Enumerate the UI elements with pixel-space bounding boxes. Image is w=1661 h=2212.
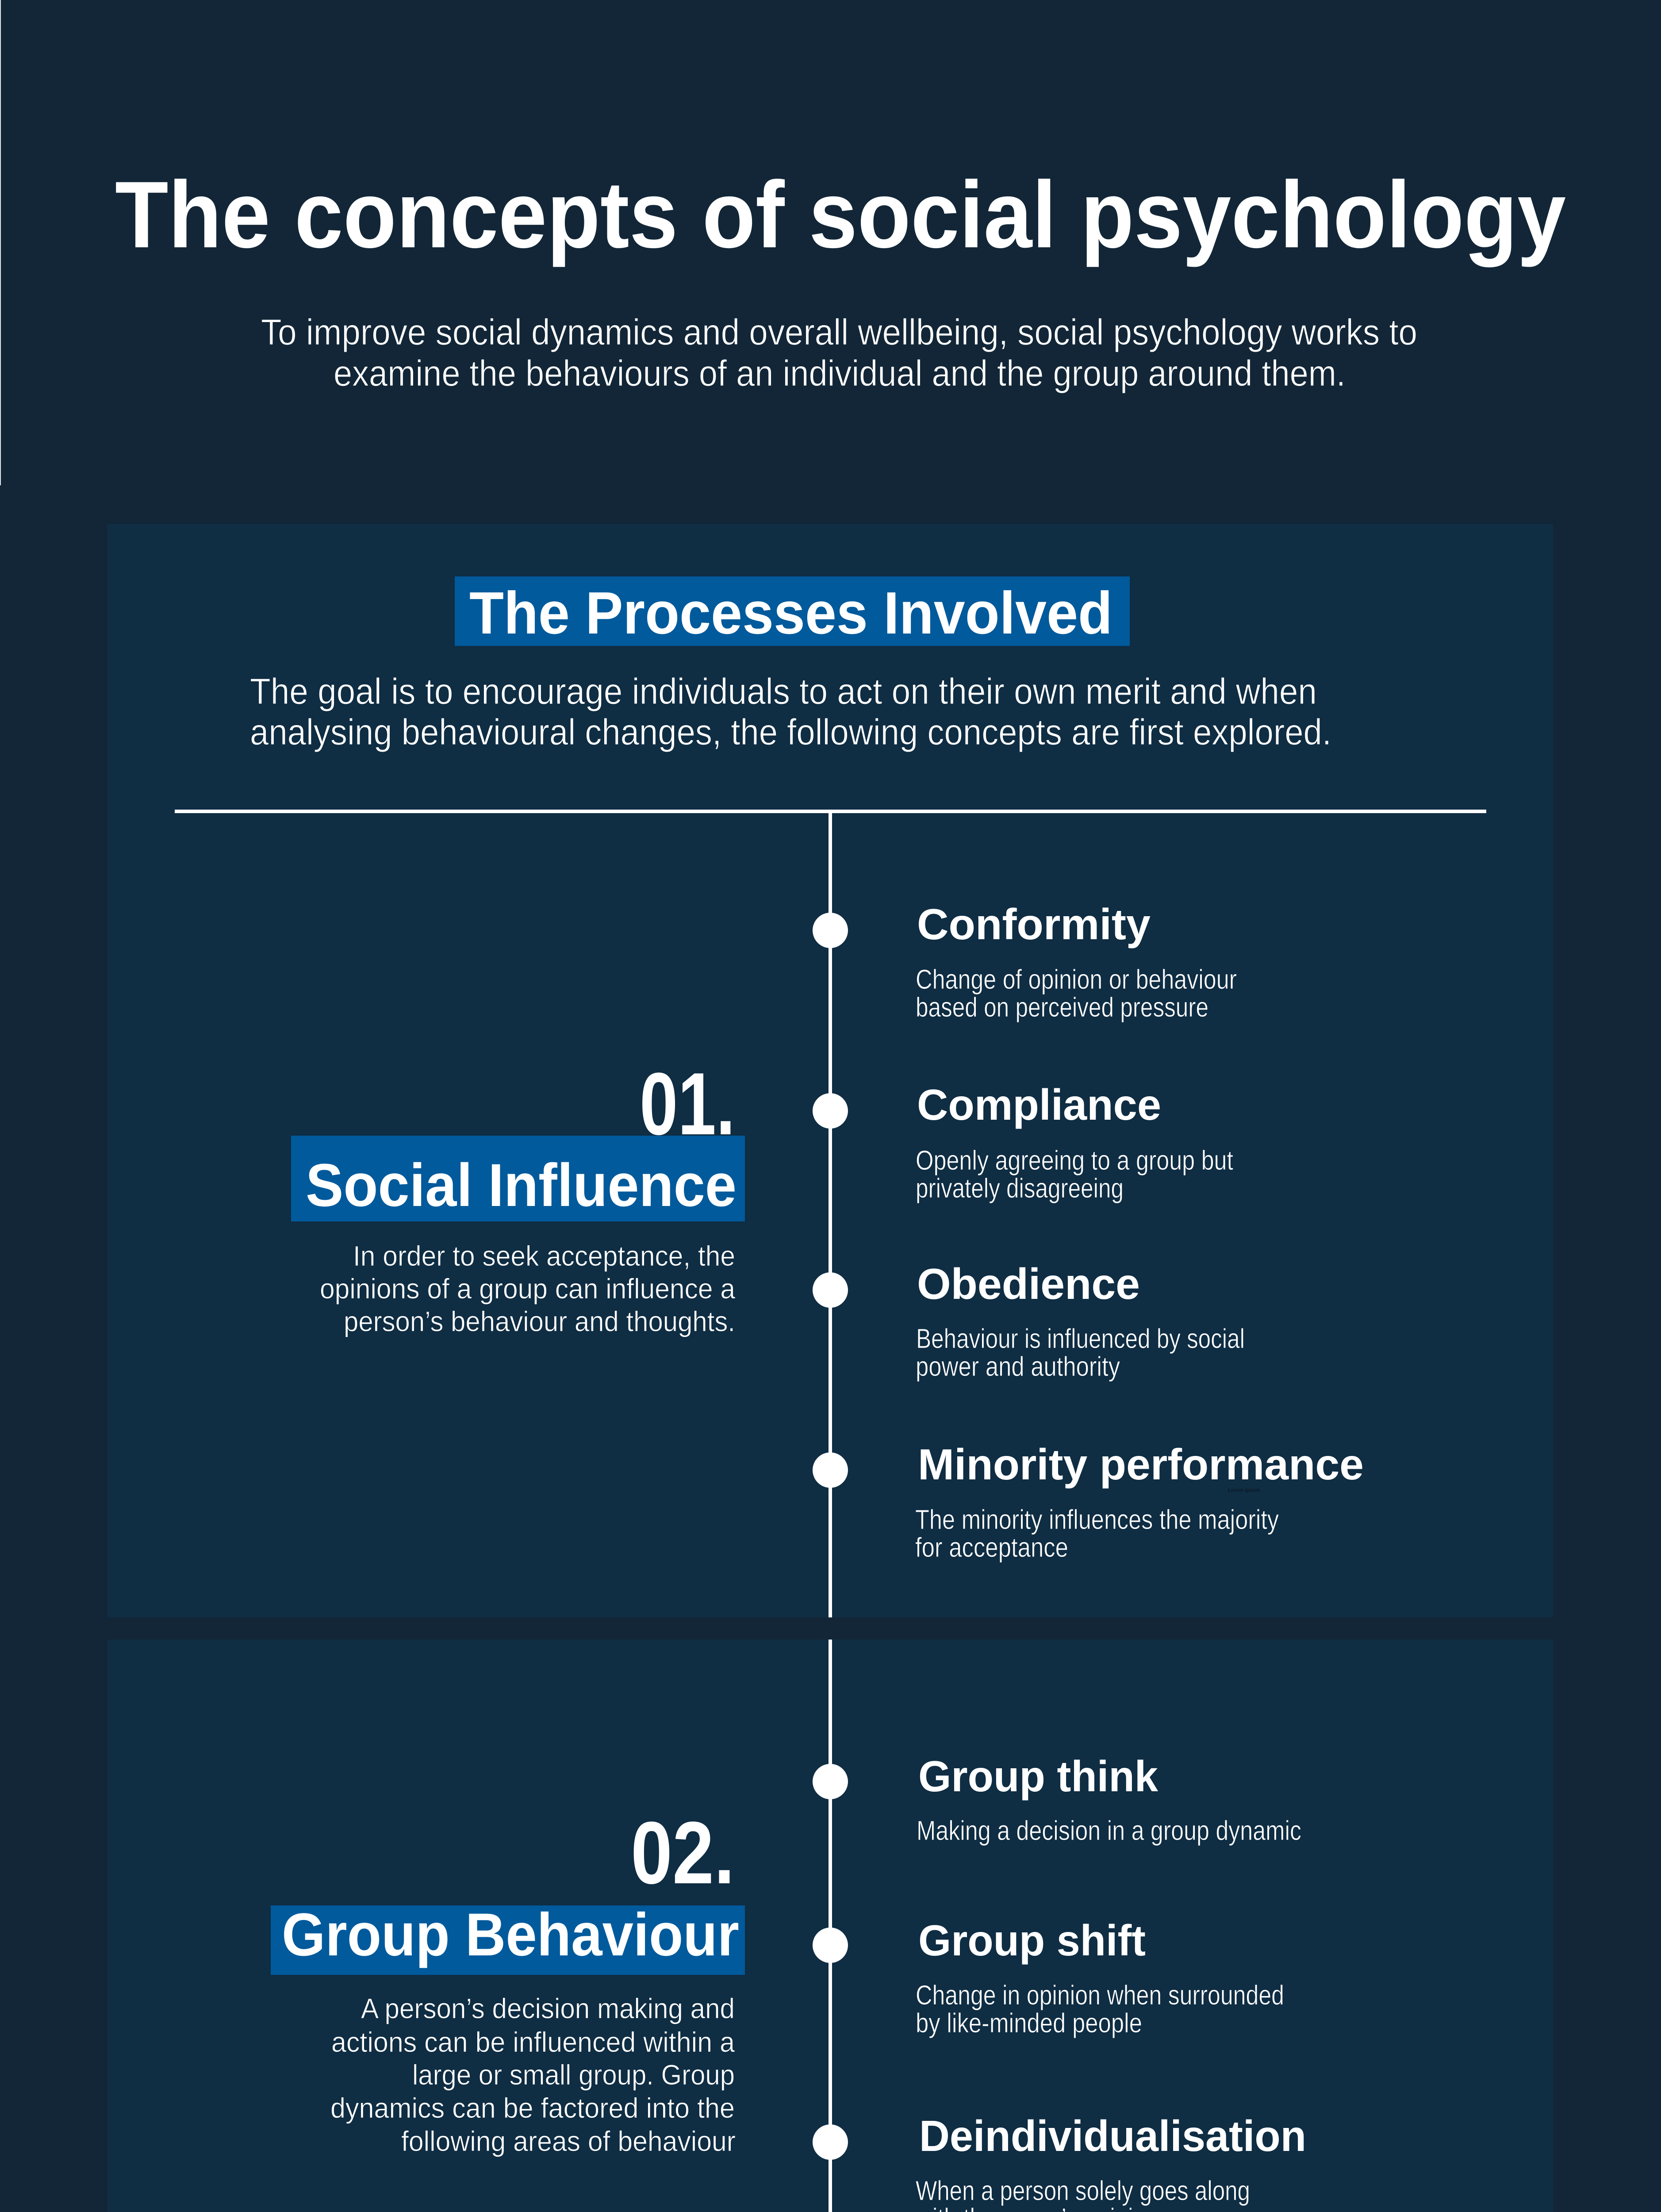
item: conformity: Change of opinion or behaviour — [916, 964, 1237, 995]
item: group think: Group think — [918, 1752, 1158, 1801]
group behaviour description: A person’s decision making and — [361, 1993, 735, 2024]
group behaviour description: actions can be influenced within a — [331, 2026, 735, 2058]
item: conformity: based on perceived pressure — [916, 992, 1208, 1023]
heading: the processes involved: The Processes Involved — [469, 580, 1112, 646]
social influence description: person’s behaviour and thoughts. — [344, 1306, 735, 1337]
item: obedience — [916, 1260, 1245, 1382]
heading: group behaviour: Group Behaviour — [282, 1901, 739, 1969]
item: obedience: Behaviour is influenced by social — [916, 1324, 1245, 1354]
timeline 2 — [813, 1640, 848, 2212]
item: conformity: Conformity — [917, 900, 1151, 949]
social influence description — [320, 1240, 735, 1337]
processes intro text: The goal is to encourage individuals to act on their own merit and when — [250, 671, 1317, 712]
item: minority performance: for acceptance — [915, 1532, 1068, 1563]
number 01: 01. — [640, 1055, 735, 1153]
item: group shift — [916, 1916, 1284, 2039]
section 02 summary — [271, 1804, 745, 2157]
horizontal rule — [175, 810, 1486, 813]
group behaviour description: following areas of behaviour — [401, 2125, 736, 2157]
item: group shift: by like-minded people — [916, 2008, 1142, 2039]
item: group shift: Change in opinion when surrounded — [916, 1980, 1284, 2011]
intro text: examine the behaviours of an individual and the group around them. — [334, 353, 1346, 394]
social influence description: In order to seek acceptance, the — [353, 1240, 735, 1272]
item: deindividualisation: Deindividualisation — [919, 2112, 1306, 2160]
group behaviour description: dynamics can be factored into the — [330, 2092, 735, 2124]
social influence description: opinions of a group can influence a — [320, 1273, 735, 1305]
panel: the processes involved and social influence — [107, 524, 1553, 1617]
item: conformity — [916, 900, 1237, 1023]
item: deindividualisation: When a person solely goes along — [916, 2176, 1250, 2206]
stray tiny label: Lorem ipsum — [1228, 1487, 1260, 1493]
panel background 1 — [107, 524, 1553, 1617]
item: compliance: Compliance — [917, 1080, 1161, 1129]
intro text — [261, 311, 1417, 394]
item: minority performance — [915, 1440, 1364, 1563]
section 01 summary — [291, 1055, 745, 1337]
heading: social influence: Social Influence — [306, 1152, 737, 1219]
panel: group behaviour — [107, 1640, 1553, 2212]
item: compliance: Openly agreeing to a group but — [916, 1145, 1233, 1176]
intro text: To improve social dynamics and overall wellbeing, social psychology works to — [261, 311, 1417, 353]
group behaviour description: large or small group. Group — [412, 2059, 735, 2091]
header — [115, 162, 1566, 394]
item: group think: Making a decision in a group dynamic — [917, 1816, 1301, 1846]
item: minority performance: The minority influences the majority — [915, 1505, 1279, 1535]
item: compliance — [916, 1080, 1233, 1204]
left edge hairline — [0, 0, 1, 485]
processes intro text: analysing behavioural changes, the following concepts are first explored. — [250, 711, 1331, 753]
item: minority performance: Minority performance — [918, 1440, 1364, 1489]
processes intro text — [250, 671, 1331, 753]
panel background 2 — [107, 1640, 1553, 2212]
group behaviour description — [330, 1993, 736, 2157]
item: group think — [917, 1752, 1301, 1846]
timeline 1 — [813, 811, 848, 1617]
item: obedience: Obedience — [917, 1260, 1140, 1308]
number 02: 02. — [631, 1804, 735, 1902]
title: The concepts of social psychology — [115, 162, 1566, 268]
item: obedience: power and authority — [916, 1352, 1120, 1382]
item: deindividualisation — [915, 2112, 1306, 2212]
item: compliance: privately disagreeing — [916, 1173, 1124, 1204]
item: group shift: Group shift — [918, 1916, 1146, 1965]
